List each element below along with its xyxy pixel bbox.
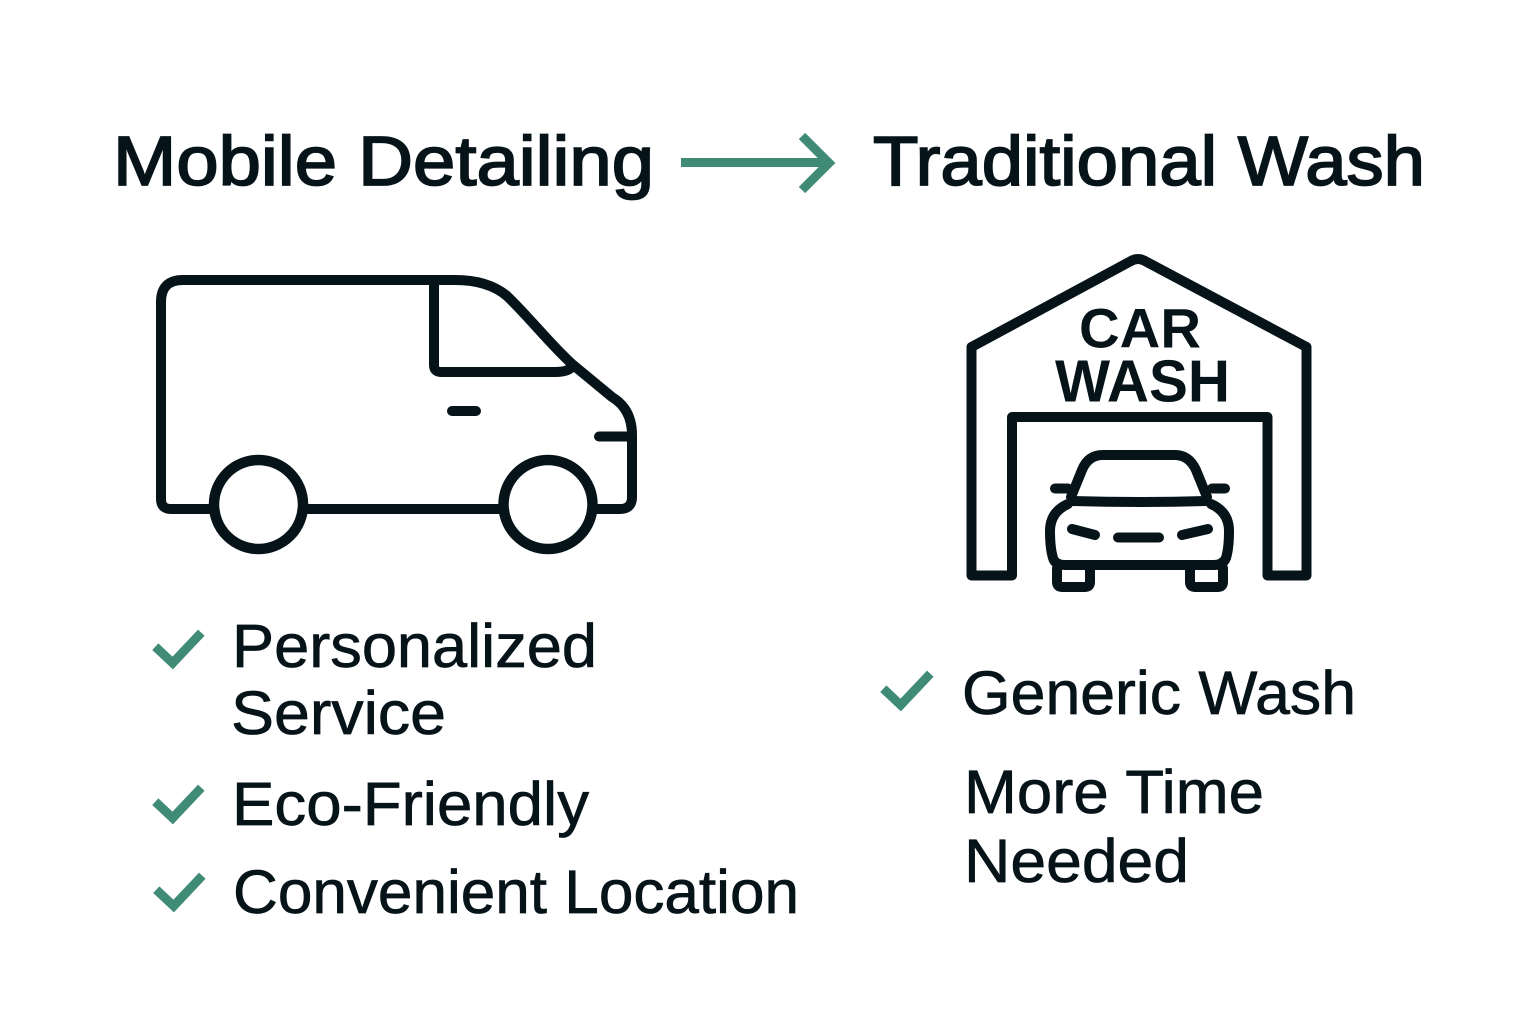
check icon — [883, 674, 930, 705]
heading: Traditional Wash: Traditional Wash — [873, 122, 1425, 200]
icon: delivery van — [161, 280, 632, 549]
text: More Time Needed: Needed — [964, 827, 1189, 895]
text: Eco-Friendly: Eco-Friendly — [232, 770, 590, 838]
text: Personalized Service: Service — [231, 679, 446, 747]
text: Convenient Location: Convenient Location — [233, 858, 799, 926]
text: More Time Needed: More Time — [964, 758, 1264, 826]
text: Generic Wash: Generic Wash — [962, 659, 1356, 727]
building sign: CAR — [1079, 296, 1201, 360]
check icon — [155, 788, 201, 818]
text: Personalized Service: Personalized — [232, 612, 597, 680]
building outline — [972, 259, 1306, 576]
car front — [1050, 455, 1229, 587]
icon: car wash building — [972, 259, 1306, 587]
icon: car wash building: WASH — [1055, 348, 1230, 414]
checklist: mobile detailing benefits — [155, 612, 799, 926]
heading: Mobile Detailing: Mobile Detailing — [113, 122, 654, 200]
arrow: from mobile detailing to traditional wash — [681, 136, 829, 190]
check icon — [156, 876, 202, 906]
check icon — [155, 633, 201, 663]
checklist: traditional wash traits — [883, 659, 1356, 895]
